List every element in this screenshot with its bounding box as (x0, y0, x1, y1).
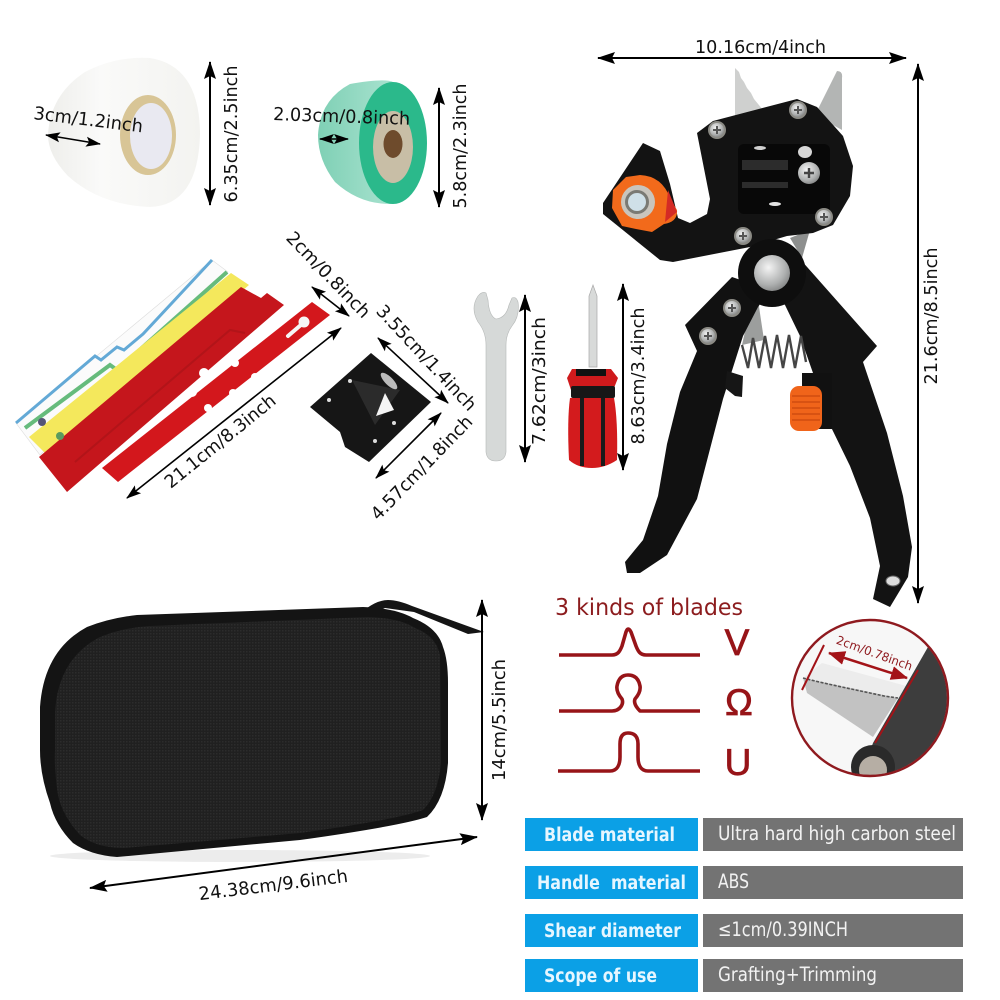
row: scope of use: Scope of use (544, 966, 657, 987)
grafting pruner (603, 68, 912, 607)
dimension: white tape width: 3cm/1.2inch (32, 103, 144, 137)
dimension: case length (90, 837, 477, 905)
row: blade material: Ultra hard high carbon steel (718, 822, 956, 845)
wrench (474, 292, 518, 461)
dimension: case length: 24.38cm/9.6inch (198, 866, 349, 905)
dimension: green tape width: 2.03cm/0.8inch (273, 104, 410, 130)
omega blade profile: Ω (725, 682, 753, 723)
screwdriver (567, 285, 618, 468)
U blade profile (558, 733, 751, 783)
row: handle material (525, 866, 963, 899)
dimension: pruner height: 21.6cm/8.5inch (921, 248, 942, 384)
spring (742, 335, 806, 368)
dimension: green tape diameter: 5.8cm/2.3inch (450, 84, 471, 208)
dimension: pruner width: 10.16cm/4inch (695, 37, 826, 58)
row: shear diameter: ≤1cm/0.39INCH (718, 918, 848, 941)
dimension: tag width: 2cm/0.8inch (282, 228, 374, 323)
carrying case (40, 600, 484, 862)
orange adjustment knob (612, 175, 677, 232)
row: shear diameter (525, 914, 963, 947)
row: blade material (525, 818, 963, 851)
head window (738, 144, 830, 214)
dimension: white tape diameter: 6.35cm/2.5inch (221, 66, 242, 202)
omega blade profile (559, 675, 753, 723)
blade detail callout circle (790, 618, 950, 778)
dimension: wrench length: 7.62cm/3inch (529, 317, 550, 445)
row: scope of use (525, 959, 963, 992)
green grafting tape roll (318, 80, 427, 204)
handle eyelet (886, 576, 900, 586)
heading: 3 kinds of blades: 3 kinds of blades (555, 595, 743, 621)
latch (725, 371, 743, 397)
screws (699, 101, 833, 345)
row: shear diameter: Shear diameter (544, 921, 682, 942)
dimension: tag length (127, 328, 341, 498)
row: blade material: Blade material (544, 825, 675, 846)
dimension: tag length: 21.1cm/8.3inch (161, 390, 280, 493)
row: handle material: ABS (718, 870, 749, 893)
V blade profile (559, 622, 750, 663)
white grafting tape roll (48, 58, 200, 207)
U blade profile: U (725, 742, 751, 783)
row: scope of use: Grafting+Trimming (718, 963, 877, 986)
dimension: case height: 14cm/5.5inch (489, 659, 510, 781)
dimension: green tape diameter (439, 84, 471, 208)
dimension: bracket height: 3.55cm/1.4inch (372, 301, 480, 416)
orange lock slider (790, 373, 832, 431)
blade detail callout circle: 2cm/0.78inch (834, 633, 914, 673)
dimension: screwdriver length: 8.63cm/3.4inch (628, 308, 649, 444)
dimension: bracket width: 4.57cm/1.8inch (367, 412, 477, 525)
V blade profile: V (725, 622, 750, 663)
row: handle material: Handle material (537, 873, 686, 894)
plant tags (16, 260, 330, 492)
black blade holder bracket (310, 353, 431, 462)
spec table (525, 818, 963, 992)
